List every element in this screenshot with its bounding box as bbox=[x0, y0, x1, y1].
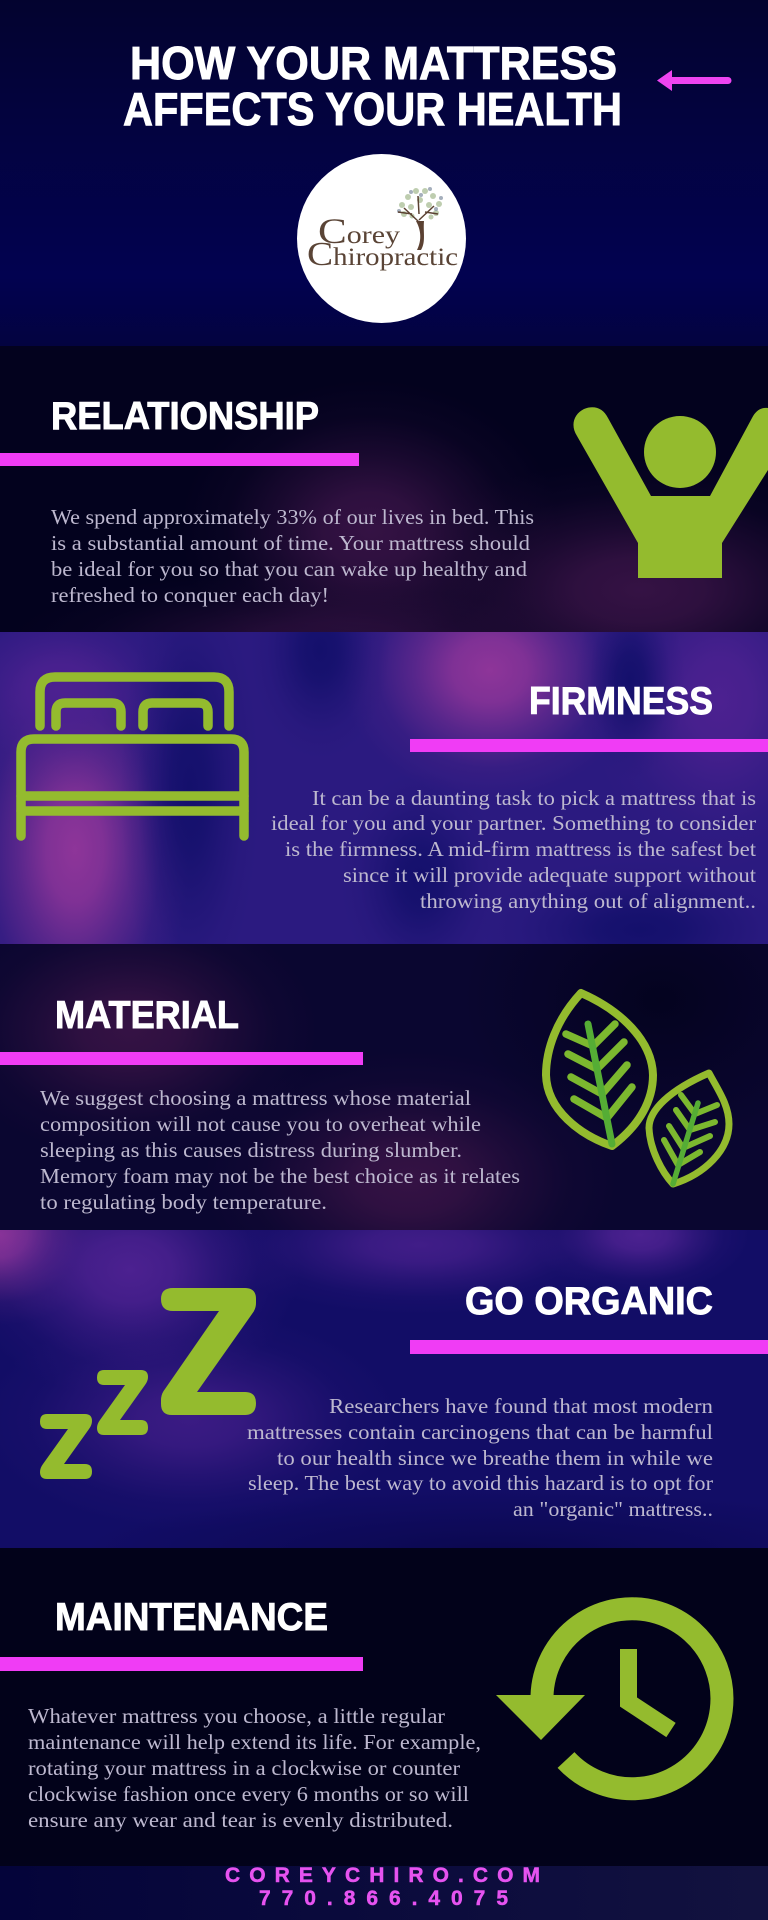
logo: Corey Chiropractic: Corey bbox=[318, 211, 401, 251]
background glow bbox=[0, 632, 768, 944]
arrow bbox=[657, 70, 732, 91]
heading: FIRMNESS bbox=[529, 680, 713, 723]
icon: sleep letters bbox=[40, 1288, 256, 1479]
heading: MATERIAL bbox=[55, 994, 239, 1037]
text block: an "organic" mattress.. bbox=[513, 1497, 713, 1521]
panel: header bbox=[0, 0, 768, 346]
text block: rotating your mattress in a clockwise or counter bbox=[28, 1756, 460, 1780]
title: AFFECTS YOUR HEALTH bbox=[123, 83, 622, 135]
text block: mattresses contain carcinogens that can be harmful bbox=[247, 1420, 713, 1444]
small leaf bbox=[649, 1073, 729, 1184]
text block: sleeping as this causes distress during slumber. bbox=[40, 1138, 462, 1162]
text block: be ideal for you so that you can wake up healthy and bbox=[51, 557, 527, 581]
phone number: 770.866.4075 bbox=[259, 1887, 508, 1910]
divider bar bbox=[0, 1657, 363, 1671]
divider bar bbox=[0, 453, 359, 466]
panel: maintenance bbox=[0, 1548, 768, 1866]
icon: clock with counter-clockwise arrow bbox=[496, 1609, 722, 1789]
background glow bbox=[0, 1230, 768, 1548]
text block: Researchers have found that most modern bbox=[329, 1394, 713, 1418]
text block: refreshed to conquer each day! bbox=[51, 583, 329, 607]
text block: maintenance will help extend its life. For example, bbox=[28, 1730, 481, 1754]
heading: MAINTENANCE bbox=[55, 1596, 328, 1639]
panel: relationship bbox=[0, 402, 768, 632]
large leaf bbox=[546, 993, 653, 1146]
text block: Memory foam may not be the best choice as it relates bbox=[40, 1164, 520, 1188]
background glow bbox=[0, 944, 768, 1230]
logo: Corey Chiropractic bbox=[297, 154, 466, 323]
text block: clockwise fashion once every 6 months or so will bbox=[28, 1782, 469, 1806]
text block bbox=[28, 1704, 481, 1832]
text block: to regulating body temperature. bbox=[40, 1190, 327, 1214]
text block: since it will provide adequate support without bbox=[343, 863, 756, 887]
text block: ensure any wear and tear is evenly distributed. bbox=[28, 1808, 453, 1832]
panel: footer contact bbox=[0, 1864, 768, 1920]
text block bbox=[271, 786, 756, 913]
text block: We suggest choosing a mattress whose material bbox=[40, 1086, 471, 1110]
title: HOW YOUR MATTRESS bbox=[130, 37, 617, 89]
panel: go organic bbox=[0, 1230, 768, 1548]
panel: firmness bbox=[0, 632, 768, 944]
text block: is the firmness. A mid-firm mattress is the safest bet bbox=[285, 837, 756, 861]
icon: leaves bbox=[546, 993, 729, 1184]
divider bar bbox=[410, 1340, 768, 1354]
icon: bed bbox=[21, 677, 244, 836]
text block: We spend approximately 33% of our lives in bed. This bbox=[51, 505, 534, 529]
text block: composition will not cause you to overheat while bbox=[40, 1112, 481, 1136]
website: COREYCHIRO.COM bbox=[225, 1864, 540, 1887]
text block: sleep. The best way to avoid this hazard is to opt for bbox=[248, 1471, 713, 1495]
panel: material bbox=[0, 944, 768, 1230]
text block: ideal for you and your partner. Something to consider bbox=[271, 811, 756, 835]
text block: Whatever mattress you choose, a little regular bbox=[28, 1704, 445, 1728]
text block: It can be a daunting task to pick a mattress that is bbox=[312, 786, 756, 810]
text block bbox=[51, 505, 534, 607]
text block bbox=[40, 1086, 520, 1214]
logo: Corey Chiropractic: Chiropractic bbox=[307, 236, 458, 273]
heading: RELATIONSHIP bbox=[51, 395, 319, 438]
icon: person with raised arms bbox=[573, 407, 768, 578]
text block: is a substantial amount of time. Your mattress should bbox=[51, 531, 530, 555]
icon: tree bbox=[397, 187, 443, 250]
text block: to our health since we breathe them in while we bbox=[277, 1446, 713, 1470]
title bbox=[123, 37, 622, 135]
divider bar bbox=[0, 1052, 363, 1065]
divider bar bbox=[410, 739, 768, 752]
heading: GO ORGANIC bbox=[465, 1280, 713, 1323]
text block: throwing anything out of alignment.. bbox=[420, 889, 756, 913]
text block bbox=[247, 1394, 713, 1521]
background glow bbox=[102, 413, 768, 632]
